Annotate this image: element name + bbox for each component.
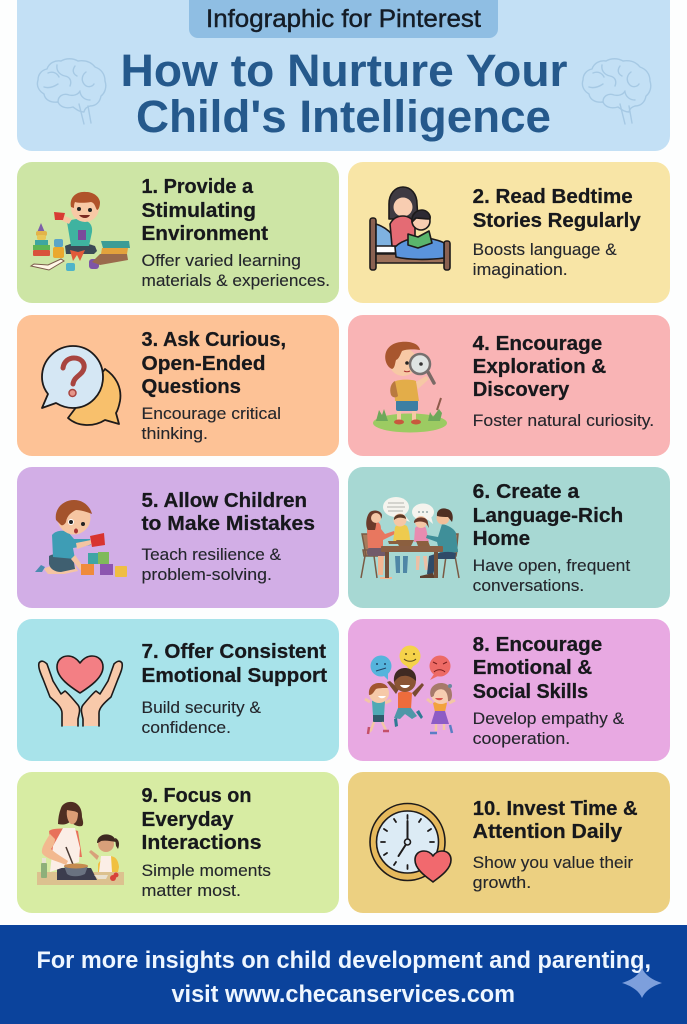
body text: imagination.: [473, 261, 568, 279]
heading: Questions: [142, 375, 241, 398]
title: [120, 45, 568, 142]
card 3: Ask Curious, Open-Ended Questions: [17, 315, 339, 456]
card 9: Focus on Everyday Interactions: [17, 772, 339, 913]
body text: [142, 405, 281, 443]
heading: 10. Invest Time &: [473, 797, 638, 820]
body text: [473, 557, 631, 595]
heading: 6. Create a: [473, 480, 580, 503]
body text: [142, 546, 281, 584]
icon: child stacking blocks: [35, 500, 127, 577]
heading: [142, 784, 262, 854]
body text: confidence.: [142, 719, 231, 737]
icon: brain left: [37, 59, 106, 124]
heading: Stimulating: [142, 199, 256, 222]
body text: Teach resilience &: [142, 546, 281, 564]
heading: Home: [473, 527, 530, 550]
body text: Develop empathy &: [473, 710, 624, 728]
icon: children with emotion faces: [365, 646, 455, 734]
heading: Emotional &: [473, 656, 592, 679]
heading: 3. Ask Curious,: [142, 328, 286, 351]
heading: 1. Provide a: [142, 175, 254, 198]
footer banner: [0, 925, 687, 1024]
body text: Encourage critical: [142, 405, 281, 423]
body text: materials & experiences.: [142, 272, 330, 290]
heading: [142, 640, 327, 687]
heading: [473, 633, 602, 703]
heading: 7. Offer Consistent: [142, 640, 326, 663]
body text: [142, 699, 261, 737]
title: Child's Intelligence: [136, 91, 551, 142]
heading: [473, 332, 606, 401]
footer text: [36, 947, 651, 1008]
heading: Attention Daily: [473, 820, 623, 843]
body text: Show you value their: [473, 854, 634, 872]
icon: hands holding a heart: [39, 656, 122, 726]
heading: Everyday: [142, 808, 234, 831]
heading: [473, 480, 623, 550]
heading: 4. Encourage: [473, 332, 602, 355]
icon: brain right: [582, 59, 651, 124]
footer text: visit www.checanservices.com: [172, 981, 515, 1008]
tag: Infographic for Pinterest: Infographic for Pinterest: [206, 5, 481, 33]
card 10: Invest Time & Attention Daily: [348, 772, 670, 913]
body text: problem-solving.: [142, 566, 272, 584]
card 6: Create a Language-Rich Home: [348, 467, 670, 608]
heading: 2. Read Bedtime: [473, 185, 633, 208]
icon: parent reading to child in bed: [370, 187, 450, 270]
heading: [142, 489, 315, 535]
heading: to Make Mistakes: [142, 512, 315, 535]
body text: Offer varied learning: [142, 252, 301, 270]
body text: cooperation.: [473, 730, 570, 748]
body text: [473, 241, 617, 279]
body text: [142, 252, 330, 290]
body text: matter most.: [142, 882, 241, 900]
heading: [473, 797, 638, 843]
heading: Exploration &: [473, 355, 606, 378]
icon: clock with heart: [370, 804, 451, 882]
icon: family talking at table: [361, 497, 459, 579]
body text: Have open, frequent: [473, 557, 631, 575]
icon: child with magnifying glass: [373, 342, 447, 432]
heading: Discovery: [473, 378, 570, 401]
heading: Emotional Support: [142, 664, 327, 687]
icon: sparkle: [622, 968, 662, 998]
heading: Stories Regularly: [473, 209, 641, 232]
header panel: [17, 0, 670, 151]
card 4: Encourage Exploration & Discovery: [348, 315, 670, 456]
heading: 5. Allow Children: [142, 489, 307, 512]
body text: Build security &: [142, 699, 261, 717]
card 8: Encourage Emotional & Social Skills: [348, 619, 670, 761]
heading: [473, 185, 641, 232]
heading: Open-Ended: [142, 352, 266, 375]
heading: Interactions: [142, 831, 262, 854]
title: How to Nurture Your: [120, 45, 568, 96]
body text: Foster natural curiosity.: [473, 412, 654, 430]
heading: Environment: [142, 222, 268, 245]
icon: parent and child cooking: [37, 802, 124, 885]
body text: [473, 854, 634, 892]
card 2: Read Bedtime Stories Regularly: [348, 162, 670, 303]
footer text: For more insights on child development and parenting,: [36, 947, 651, 974]
icon: child playing with blocks and books: [31, 192, 130, 271]
body text: Boosts language &: [473, 241, 617, 259]
heading: Social Skills: [473, 680, 588, 703]
heading: [142, 328, 286, 398]
heading: 9. Focus on: [142, 784, 252, 807]
card 5: Allow Children to Make Mistakes: [17, 467, 339, 608]
heading: 8. Encourage: [473, 633, 602, 656]
heading: Language-Rich: [473, 504, 623, 527]
card 7: Offer Consistent Emotional Support: [17, 619, 339, 761]
heading: [142, 175, 268, 245]
body text: conversations.: [473, 577, 584, 595]
body text: growth.: [473, 874, 531, 892]
body text: Simple moments: [142, 862, 271, 880]
body text: thinking.: [142, 425, 208, 443]
body text: [473, 710, 624, 748]
card 1: Provide a Stimulating Environment: [17, 162, 339, 303]
body text: [142, 862, 271, 900]
icon: speech bubbles with question mark: [42, 346, 120, 425]
tag: Infographic for Pinterest: [189, 0, 498, 38]
